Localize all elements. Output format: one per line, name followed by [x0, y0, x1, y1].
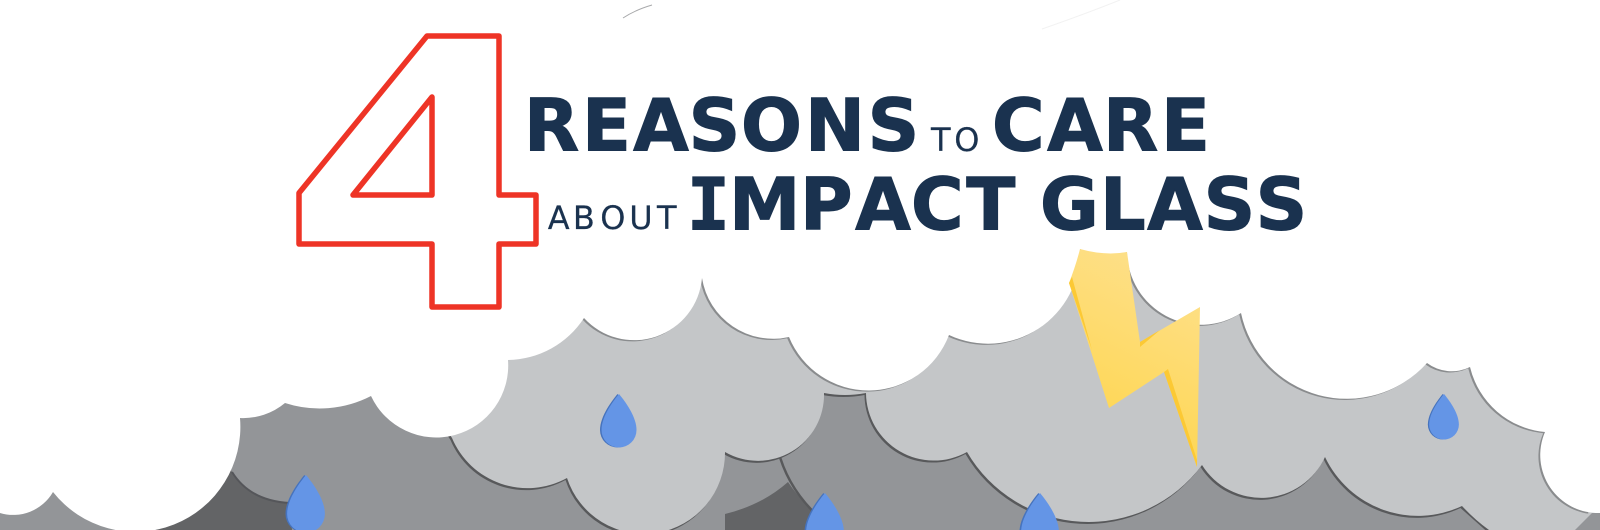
title line 2: I	[687, 162, 730, 246]
title line 1: CARE	[992, 84, 1210, 168]
back storm cloud: medium grey	[0, 380, 1600, 530]
white cloud shadow	[582, 249, 1588, 514]
white cloud top wisp left	[623, 5, 652, 18]
back storm cloud: dark patch centre	[725, 482, 826, 530]
title line 1: TO	[930, 121, 979, 159]
title line 2: MPACT	[729, 162, 1015, 246]
title line 1: REASONS	[524, 84, 919, 168]
title line 2: ABOUT	[548, 199, 677, 237]
icon: water drop 1	[285, 475, 325, 530]
white cloud top wisp right	[1042, 0, 1120, 29]
cloud shadow line: centre	[778, 450, 822, 520]
icon: water drop 3	[804, 493, 844, 530]
middle cloud: light grey	[440, 250, 1600, 530]
icon: water drop 5	[1428, 394, 1459, 439]
icon: water drop 2	[600, 394, 636, 448]
title	[524, 84, 1307, 246]
numeral 4 outline	[299, 36, 536, 307]
back storm cloud: dark patch left	[150, 462, 292, 530]
cloud shadow line: left	[232, 472, 290, 503]
middle cloud shadow	[448, 393, 1489, 530]
icon: lightning bolt	[1069, 249, 1200, 467]
icon: water drop 4	[1019, 493, 1059, 530]
title line 2: GLASS	[1040, 162, 1307, 246]
